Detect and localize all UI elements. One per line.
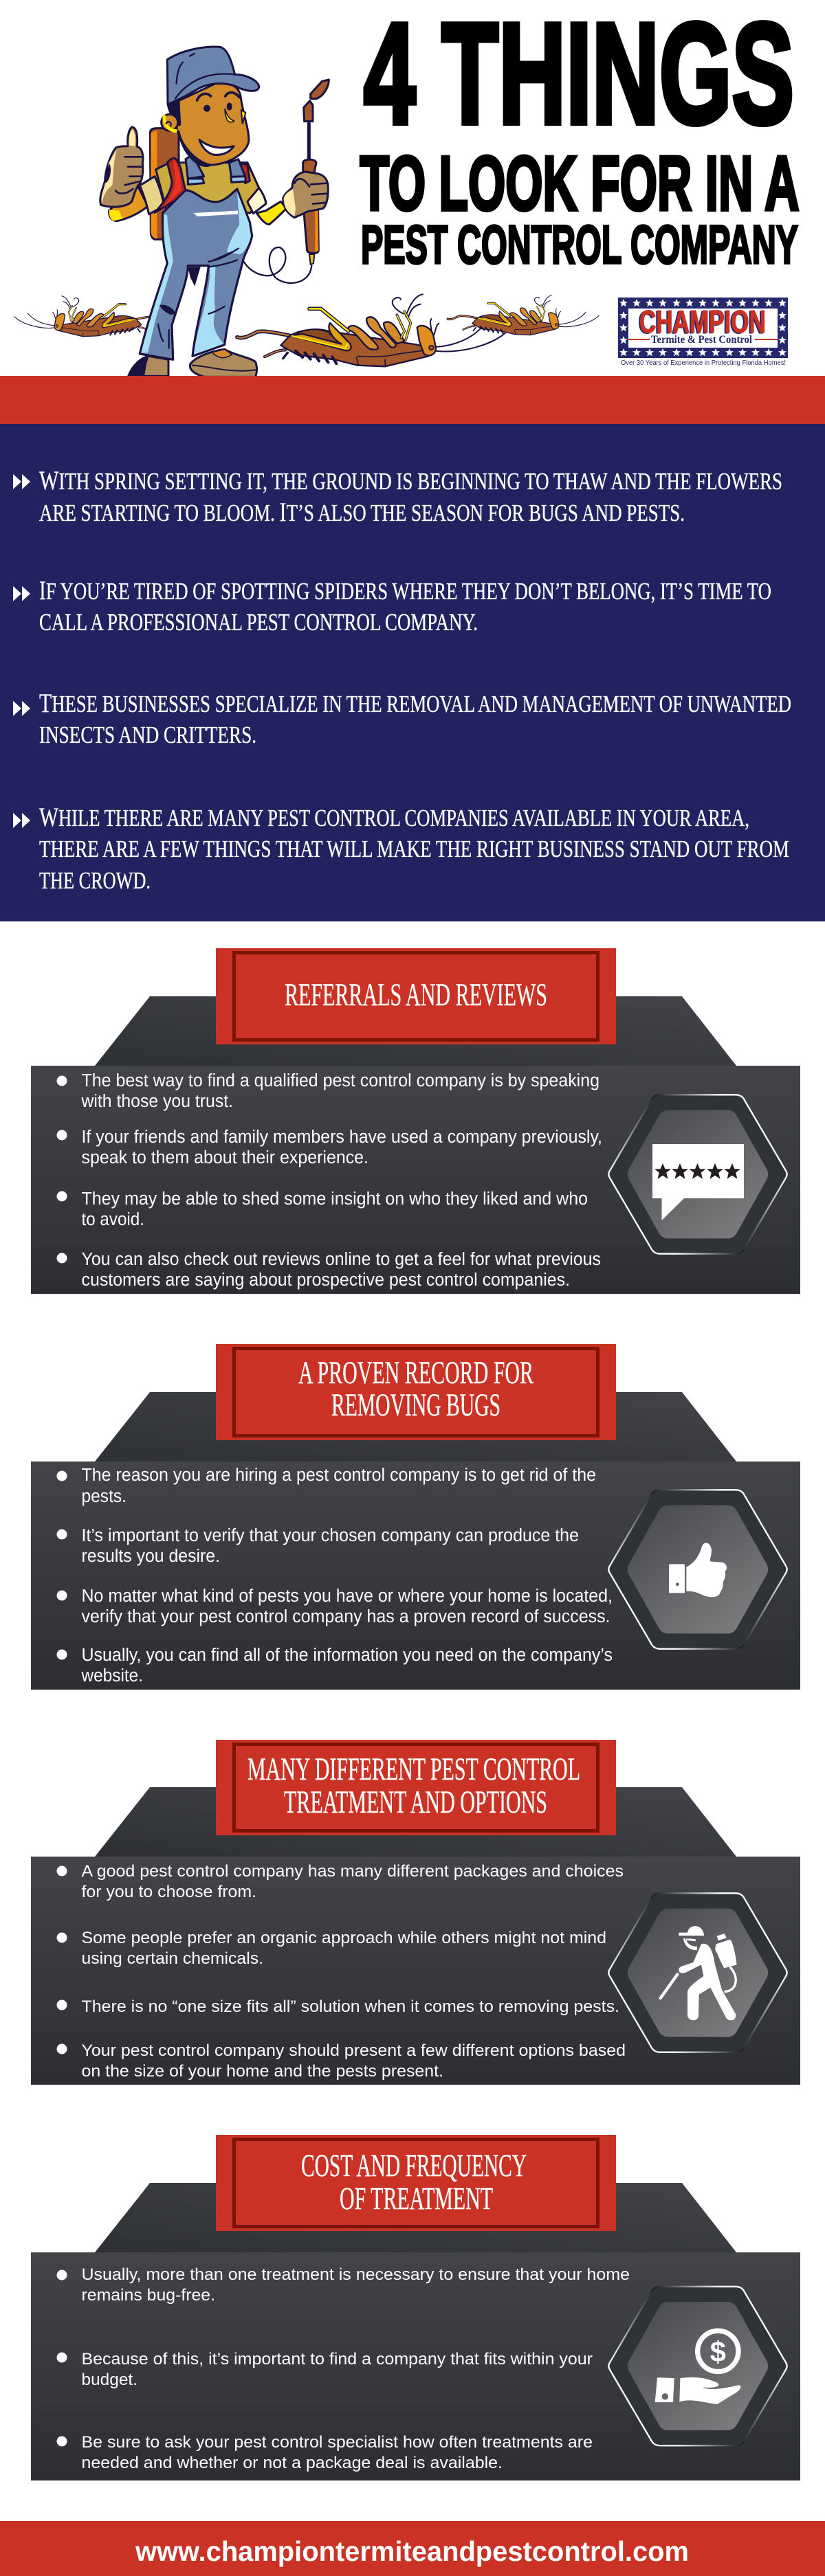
bullet: on the size of your home and the pests present. [81,2062,443,2081]
bullet: If your friends and family members have used a company previously, [81,1128,602,1147]
heading banner: REFERRALS AND REVIEWS [285,977,547,1013]
bullet [56,1526,579,1566]
bullet: Your pest control company should present a few different options based [81,2041,626,2060]
bullet: There is no “one size fits all” solution when it comes to removing pests. [81,1997,619,2016]
bullet [56,1587,613,1626]
icon: thumbs up [608,1490,788,1649]
bullet: A good pest control company has many different packages and choices [81,1862,624,1881]
illustration: dead roach left [14,296,166,337]
heading banner [216,2135,616,2231]
bullet [56,1250,601,1290]
logo: Champion Termite & Pest Control: CHAMPION [638,304,764,340]
bullet [56,1929,606,1968]
footer: website [0,2521,825,2576]
bullet: budget. [81,2371,138,2389]
icon: hand holding dollar coin [608,2287,788,2445]
bullet: remains bug-free. [81,2286,215,2305]
panel: cost and frequency [31,2135,800,2480]
bullet: for you to choose from. [81,1883,256,1901]
intro point 4: THE CROWD. [39,867,151,894]
bullet: to avoid. [81,1210,144,1229]
bullet [56,1128,602,1167]
intro point 2 [13,576,771,636]
illustration: dead roach center [237,294,507,366]
icon: review speech bubble with five stars [608,1095,788,1254]
bullet: The best way to find a qualified pest control company is by speaking [81,1071,600,1090]
intro point 3: INSECTS AND CRITTERS. [39,721,256,748]
intro point 1 [13,466,782,527]
bullet: Usually, you can find all of the information you need on the company’s [81,1646,613,1665]
footer: website: www.championtermiteandpestcontrol.com [135,2535,689,2567]
heading banner: COST AND FREQUENCY [301,2148,527,2184]
heading banner [216,1344,616,1440]
bullet [56,1466,596,1506]
icon: technician spraying with backpack tank [608,1893,788,2052]
intro point 1: ARE STARTING TO BLOOM. IT’S ALSO THE SEASON FOR BUGS AND PESTS. [39,497,685,527]
intro point 4 [13,803,789,894]
bullet: speak to them about their experience. [81,1148,368,1167]
logo: Champion Termite & Pest Control [618,298,788,367]
title [360,0,799,275]
logo: Champion Termite & Pest Control: Termite & Pest Control [651,334,753,346]
bullet: pests. [81,1487,126,1506]
bullet [56,1862,624,1901]
heading banner: OF TREATMENT [340,2181,493,2217]
bullet: Be sure to ask your pest control specialist how often treatments are [81,2433,593,2452]
heading banner: A PROVEN RECORD FOR [298,1355,534,1391]
icon: hand holding dollar coin: $ [710,2336,726,2368]
bullet: They may be able to shed some insight on who they liked and who [81,1189,588,1209]
heading banner: REMOVING BUGS [331,1387,500,1423]
bullet: using certain chemicals. [81,1949,263,1968]
bullet: website. [81,1666,143,1685]
bullet [56,1646,613,1685]
bullet: The reason you are hiring a pest control company is to get rid of the [81,1466,596,1485]
bullet: It’s important to verify that your chosen company can produce the [81,1526,579,1545]
illustration: pest control technician [100,47,329,377]
panel: referrals and reviews [31,948,800,1294]
heading banner: TREATMENT AND OPTIONS [284,1784,547,1820]
bullet [56,2265,630,2305]
panel: proven record [31,1344,800,1690]
red band [0,376,825,424]
logo: Champion Termite & Pest Control: Over 30 Years of Experience in Protecting Florida Homes! [621,359,786,367]
bullet: Some people prefer an organic approach while others might not mind [81,1929,606,1947]
bullet [56,1189,588,1229]
heading banner [216,1740,616,1835]
heading banner [216,948,616,1044]
bullet [56,2041,626,2081]
bullet: Usually, more than one treatment is necessary to ensure that your home [81,2265,630,2284]
bullet [56,1071,600,1111]
bullet: with those you trust. [81,1092,233,1111]
bullet: customers are saying about prospective pest control companies. [81,1270,570,1290]
bullet [56,2350,593,2389]
bullet: Because of this, it’s important to find a company that fits within your [81,2350,593,2368]
intro point 2: CALL A PROFESSIONAL PEST CONTROL COMPANY. [39,609,478,636]
illustration: dead roach right [448,295,599,335]
intro point 3 [13,688,791,748]
heading banner: MANY DIFFERENT PEST CONTROL [248,1751,580,1787]
bullet [56,2433,593,2472]
panel: treatment options [31,1740,800,2085]
bullet: verify that your pest control company has a proven record of success. [81,1607,610,1626]
bullet: You can also check out reviews online to get a feel for what previous [81,1250,601,1269]
bullet: No matter what kind of pests you have or where your home is located, [81,1587,613,1606]
bullet: results you desire. [81,1547,220,1566]
logo: Champion Termite & Pest Control: CHAMPION [639,304,766,339]
bullet: needed and whether or not a package deal is available. [81,2454,503,2472]
panel: introduction [0,424,825,921]
